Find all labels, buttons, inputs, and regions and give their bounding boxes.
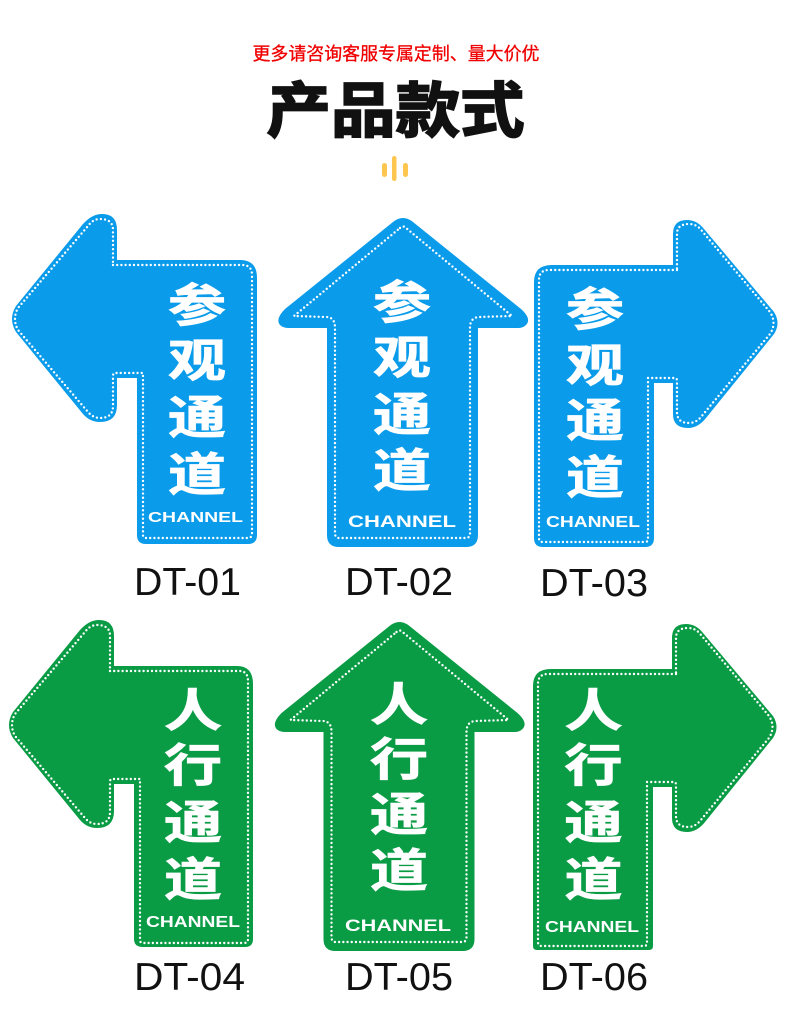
sign: DT-05 green up arrow <box>275 622 525 951</box>
sign text: 人行通道: 道 <box>370 846 428 897</box>
model label DT-02: DT-02 <box>345 561 453 604</box>
sign text: 人行通道: 道 <box>164 855 222 906</box>
sign text: 参观通道: 参 <box>373 278 431 329</box>
sign text: 人行通道: 通 <box>370 790 428 841</box>
sign text: 参观通道: 道 <box>373 446 431 497</box>
model label DT-05: DT-05 <box>345 956 453 999</box>
sign text: 人行通道: 通 <box>164 798 222 849</box>
title: 产品款式 <box>266 78 524 145</box>
sign: DT-03 blue right arrow <box>534 220 778 547</box>
sign text: 人行通道: 行 <box>564 741 623 792</box>
arrow shape: green left <box>9 620 253 947</box>
sign text: 参观通道: 道 <box>168 450 226 501</box>
sign text: 参观通道 <box>373 278 431 497</box>
arrow shape: green up <box>275 622 525 951</box>
sign text: 参观通道: 参 <box>566 285 624 336</box>
sign text: 人行通道: 人 <box>564 686 623 737</box>
arrow shape: green right <box>533 624 776 950</box>
sign text: 参观通道: 参 <box>168 281 226 332</box>
sign text: 参观通道 <box>168 281 226 501</box>
icon: yellow three-bar ornament <box>382 156 408 181</box>
sign text: 参观通道: 通 <box>566 396 624 447</box>
sign: DT-02 blue up arrow <box>278 218 528 547</box>
sign text: 人行通道 <box>564 686 623 906</box>
arrow shape: blue right <box>534 220 778 547</box>
sign: DT-06 green right arrow <box>533 624 776 950</box>
sign text: CHANNEL: CHANNEL <box>546 514 640 531</box>
sign text: 参观通道 <box>566 285 624 504</box>
sign text: CHANNEL: CHANNEL <box>146 914 240 931</box>
sign text: 人行通道: 人 <box>164 686 222 737</box>
sign text: 参观通道: 观 <box>373 333 431 384</box>
sign text: CHANNEL: CHANNEL <box>348 512 456 531</box>
model label DT-03: DT-03 <box>540 562 648 605</box>
arrow shape: blue left <box>12 214 257 544</box>
sign text: 参观通道: 通 <box>373 390 431 441</box>
sign: DT-04 green left arrow <box>9 620 253 947</box>
model label DT-04: DT-04 <box>134 956 245 999</box>
sign: DT-01 blue left arrow <box>12 214 257 544</box>
sign text: 参观通道: 观 <box>168 336 226 387</box>
sign text: CHANNEL: CHANNEL <box>545 919 639 936</box>
sign text: CHANNEL: CHANNEL <box>148 510 243 526</box>
sign text: 人行通道: 人 <box>370 680 428 731</box>
sign text: 人行通道: 行 <box>370 735 428 786</box>
sign text: 参观通道: 观 <box>566 341 624 392</box>
subtitle: red promo line: 更多请咨询客服专属定制、量大价优 <box>252 44 540 64</box>
sign text: 人行通道: 通 <box>564 798 623 849</box>
sign text: 参观通道: 通 <box>168 393 226 444</box>
sign text: 人行通道: 道 <box>564 855 623 906</box>
sign text: 人行通道: 行 <box>164 741 222 792</box>
model label DT-01: DT-01 <box>134 561 241 604</box>
sign text: 参观通道: 道 <box>566 453 624 504</box>
model label DT-06: DT-06 <box>540 956 648 999</box>
sign text: 人行通道 <box>370 680 428 897</box>
sign text: 人行通道 <box>164 686 222 906</box>
arrow shape: blue up <box>278 218 528 547</box>
sign text: CHANNEL: CHANNEL <box>345 916 451 935</box>
